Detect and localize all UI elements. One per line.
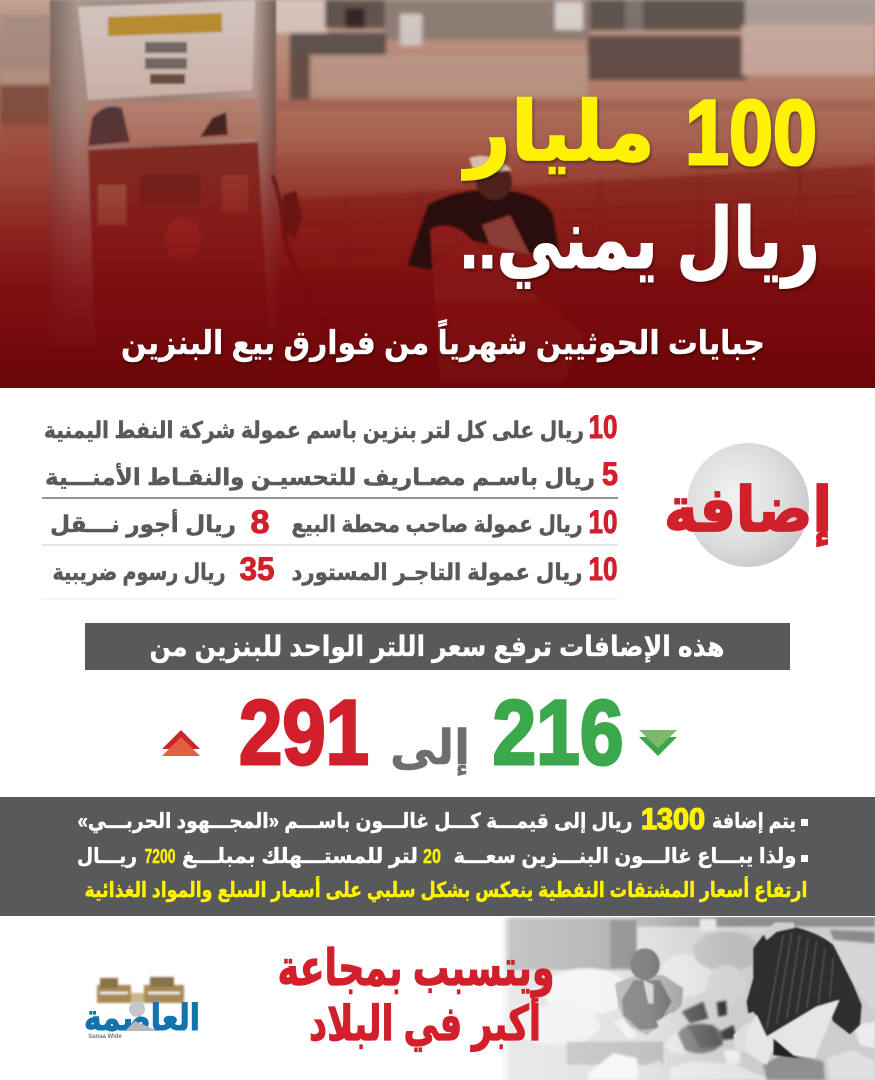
row 2: 5 rials security: [45, 456, 618, 492]
row 1: 10 rials oil company: ريال على كل لتر بنزين باسم عمولة شركة النفط اليمنية: [44, 417, 584, 444]
title: 100 billion: مليار: [461, 87, 655, 180]
icon: fuel pump: [48, 0, 302, 308]
badge: addition: [664, 443, 832, 567]
row 3: station owner and transport: 8: [250, 504, 270, 540]
row 3: station owner and transport: [50, 504, 618, 540]
row 1: 10 rials oil company: [44, 409, 618, 445]
figure: crouching child: [613, 948, 683, 1039]
detail line 1: [78, 803, 808, 836]
detail line 1: 1300: [641, 803, 705, 836]
figure: seated man: [408, 156, 585, 388]
detail line 2: ولذا يبـــاع غالـــون البنـــزين سعـــة: [454, 845, 796, 868]
number: 216: 216: [492, 682, 624, 784]
logo: Sanaa Wide: [88, 1034, 122, 1040]
footer heading: [278, 940, 554, 1052]
subtitle: جبايات الحوثيين شهرياً من فوارق بيع البنزين: [121, 319, 765, 363]
row 3: station owner and transport: ريال أجور نـــقل: [50, 508, 236, 538]
icon: green down arrow: [639, 730, 677, 756]
panel: hero photo with red fade: [0, 0, 875, 388]
row 4: importer and tax: 10: [588, 551, 618, 587]
panel: details band: [0, 797, 875, 916]
banner: price rise heading: هذه الإضافات ترفع سعر اللتر الواحد للبنزين من: [150, 631, 724, 663]
detail line 2: 20: [423, 846, 441, 868]
row 4: importer and tax: [52, 551, 618, 587]
detail line 2: لتر للمستـــهلك بمبلـــغ: [182, 845, 418, 868]
row 4: importer and tax: ريال عمولة التاجـر المستورد: [292, 559, 582, 586]
row 2: 5 rials security: 5: [602, 456, 618, 492]
price comparison: [162, 682, 677, 784]
row 1: 10 rials oil company: 10: [588, 409, 618, 445]
row 4: importer and tax: 35: [240, 551, 274, 587]
title: 100 billion: 100: [685, 82, 817, 184]
word: to: إلى: [390, 722, 470, 776]
logo: العاصمة: [84, 997, 200, 1038]
panel: additions list: [42, 409, 618, 599]
icon: red up arrow: [162, 730, 200, 756]
title: 100 billion: [461, 82, 817, 184]
detail line 2: 7200: [144, 846, 176, 868]
row 4: importer and tax: ريال رسوم ضريبية: [52, 559, 226, 586]
number: 291: 291: [239, 682, 369, 784]
footer heading: أكبر في البلاد: [309, 992, 541, 1052]
row 2: 5 rials security: ريال باسـم مصـاريف للتحسيـن والنقـاط الأمنـــية: [45, 462, 595, 491]
row 3: station owner and transport: ريال عمولة صاحب محطة البيع: [292, 511, 582, 538]
photo: people searching rubbish: [500, 915, 875, 1080]
row 3: station owner and transport: 10: [588, 504, 618, 540]
figure: standing man: [733, 922, 862, 1065]
logo: [84, 977, 200, 1040]
detail line 1: يتم إضافة: [712, 810, 796, 833]
badge: addition: إضافة: [664, 476, 832, 546]
detail line 2: ريـــال: [77, 845, 137, 868]
detail line 1: ريال إلى قيمـــة كـــل غالـــون باســـم «المجـــهود الحربـــي»: [78, 810, 632, 833]
detail line 2: [77, 845, 808, 868]
banner: price rise heading: [85, 623, 790, 670]
footer heading: ويتسبب بمجاعة: [278, 940, 554, 998]
